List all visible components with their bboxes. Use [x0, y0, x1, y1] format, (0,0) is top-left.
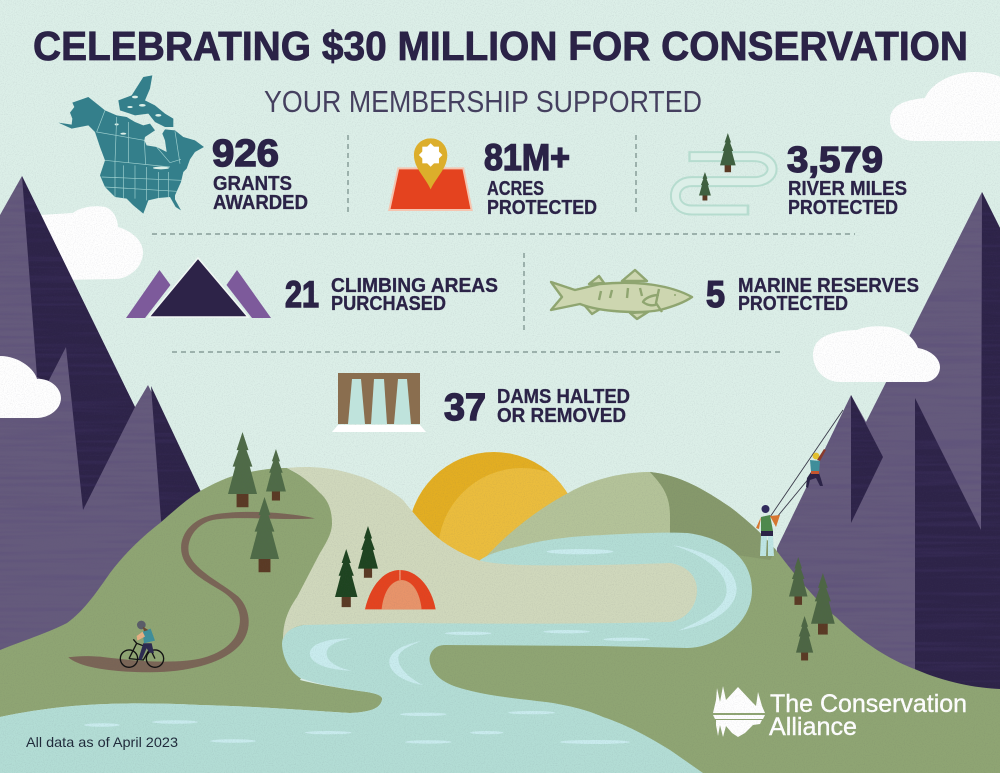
stat: grants awarded [212, 133, 308, 214]
logo: The Conservation Alliance: Alliance [769, 713, 857, 741]
stat: grants awarded: 926 [212, 133, 279, 175]
sun [412, 452, 568, 560]
stat: climbing areas [285, 274, 498, 315]
icon: winding river with trees [675, 133, 772, 210]
stat: acres protected: ACRES [487, 178, 544, 200]
logo: The Conservation Alliance [713, 686, 967, 741]
icon: acres map pin [389, 138, 472, 210]
stat: dams halted: 37 [444, 387, 486, 429]
stat: dams halted [444, 386, 630, 429]
stat: climbing areas: CLIMBING AREAS [331, 275, 498, 297]
water highlights [84, 545, 737, 744]
dividers [152, 135, 855, 352]
belayer and ropes [756, 410, 843, 556]
trees: right slope [789, 557, 835, 660]
stat: marine reserves: MARINE RESERVES [738, 275, 919, 297]
stat: grants awarded: AWARDED [213, 192, 308, 214]
icon: dam [332, 373, 426, 432]
cloud: lower left [0, 356, 61, 418]
logo: The Conservation Alliance: The Conservation [770, 690, 967, 718]
left hill [0, 468, 382, 717]
stat: acres protected: 81M+ [484, 137, 570, 178]
trees: left hill [228, 432, 286, 572]
tent [365, 570, 436, 609]
stat: grants awarded: GRANTS [213, 173, 292, 195]
icon: climbing mountains [126, 258, 271, 318]
stat: marine reserves [706, 274, 919, 315]
river [0, 533, 752, 773]
trees: campsite [335, 526, 378, 607]
mountain texture [25, 202, 1000, 667]
stat: river miles protected: 3,579 [787, 139, 883, 180]
right mountains [770, 192, 1000, 700]
beige hill and peninsula [283, 467, 697, 640]
footnote: All data as of April 2023 [26, 734, 178, 750]
title: CELEBRATING $30 MILLION FOR CONSERVATION [33, 23, 968, 69]
stat: marine reserves: PROTECTED [738, 293, 848, 315]
stat: river miles protected: RIVER MILES [788, 178, 907, 200]
subtitle: YOUR MEMBERSHIP SUPPORTED [264, 84, 702, 119]
icon: North America map [58, 75, 204, 214]
icon: fish [551, 270, 692, 319]
cloud: left behind mountain [40, 206, 143, 280]
cloud: right [813, 326, 940, 382]
stat: acres protected: PROTECTED [487, 197, 597, 219]
stat: climbing areas: PURCHASED [331, 293, 446, 315]
stat: river miles protected [787, 139, 907, 219]
stat: marine reserves: 5 [706, 274, 725, 315]
cloud: top right [890, 72, 1000, 141]
stat: river miles protected: PROTECTED [788, 197, 898, 219]
right hills and ground [420, 472, 1000, 773]
climber [806, 449, 826, 488]
bike trail [68, 512, 315, 672]
cyclist [120, 621, 164, 667]
stat: dams halted: OR REMOVED [497, 405, 626, 427]
stat: climbing areas: 21 [285, 274, 319, 315]
stat: dams halted: DAMS HALTED [497, 386, 630, 408]
stat: acres protected [484, 137, 597, 219]
left mountains [0, 176, 201, 700]
